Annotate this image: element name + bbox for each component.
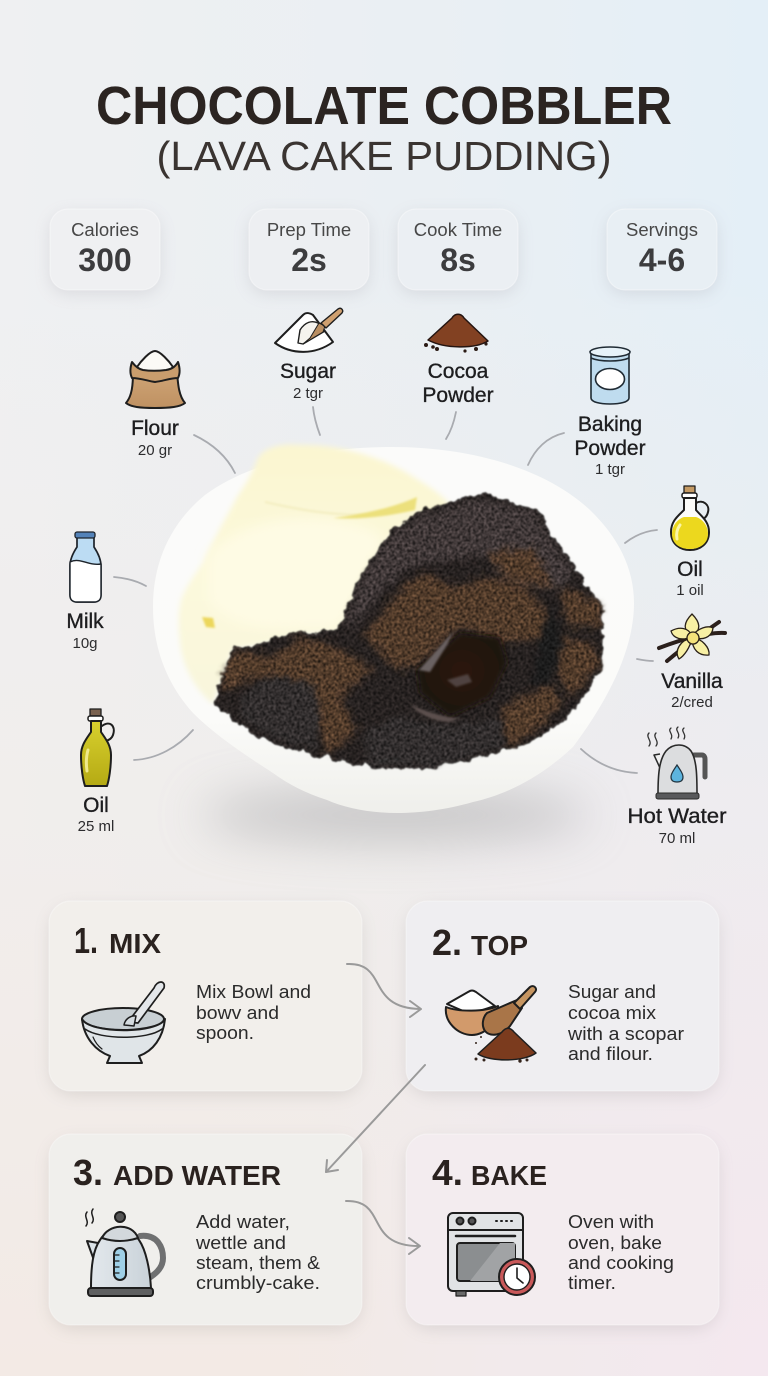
stat card: calories: 300 [78,242,132,278]
ingredient: cocoa powder: Powder [422,384,494,407]
icon: vanilla flower and pods [659,614,725,661]
icon: cocoa powder pile [424,314,488,353]
step text: crumbly-cake. [196,1272,320,1293]
step text: cocoa mix [568,1002,657,1023]
step text: Sugar and [568,981,656,1002]
stat card: cook time: 8s [440,242,476,278]
ingredient: cocoa powder [422,314,494,407]
step card 4: bake [406,1134,719,1329]
step heading: 3. [73,1152,103,1193]
step text: Oven with [568,1211,654,1232]
icon: sugar pile and scoop [275,308,343,352]
stat card: prep time [249,209,369,294]
step text: spoon. [196,1022,254,1043]
ingredient: oil left: 25 ml [78,818,114,835]
step heading: 4. [432,1152,463,1193]
ingredient: baking powder: Powder [574,437,646,460]
step text: and filour. [568,1043,653,1064]
ingredient: baking powder: Baking [578,413,642,436]
icon: mixing bowl with spoon [82,982,165,1063]
icon: flour sack [126,351,185,408]
step heading [432,1152,547,1193]
stat card: servings: 4-6 [639,242,685,278]
dark cobbler mass with brown and grey crumbs [212,493,603,769]
ingredient: flour: Flour [131,417,179,440]
step text [567,981,684,1064]
ingredient: oil right [671,486,709,599]
stat card: servings [607,209,717,294]
ingredient: sugar [275,308,343,402]
step heading: TOP [471,930,528,961]
icon: baking powder tin [590,347,630,404]
step text: wettle and [195,1232,286,1253]
arrow: step 3 to step 4 [346,1201,420,1254]
icon: milk bottle [70,532,101,602]
step heading: BAKE [471,1160,547,1191]
ingredient: cocoa powder: Cocoa [428,360,489,383]
ingredient: milk: 10g [72,635,98,652]
ingredient: oil left [78,709,114,835]
step text: Add water, [196,1211,290,1232]
ingredient: oil right: Oil [677,558,703,581]
arrow: step 2 to step 3 [326,1065,425,1172]
stat card: calories: Calories [71,219,139,240]
molten chocolate [410,632,507,722]
step text [195,1211,321,1293]
step heading: 2. [432,922,462,963]
step heading [432,922,528,963]
step text: timer. [568,1272,616,1293]
step heading: MIX [109,928,161,959]
ingredient: vanilla: 2/cred [671,694,713,711]
stat card: calories [50,209,160,294]
title: CHOCOLATE COBBLER [96,76,672,136]
icon: sugar bowl, scoop and cocoa pile [446,986,536,1063]
ingredient: sugar: Sugar [280,360,336,383]
step text: Mix Bowl and [196,981,311,1002]
step text [568,1211,674,1293]
step text: oven, bake [568,1232,662,1253]
ingredient: vanilla [659,614,725,711]
stat card: cook time: Cook Time [414,219,502,240]
step card 2: top [406,901,719,1095]
icon: kettle with steam and water drop [648,727,705,799]
stat card: prep time: Prep Time [267,219,351,240]
ingredient: hot water: 70 ml [659,830,695,847]
icon: oven with timer [448,1213,535,1296]
step text [196,981,311,1043]
icon: olive oil bottle [81,709,114,786]
icon: oil cruet [671,486,709,550]
ingredient: baking powder: 1 tgr [595,461,625,478]
ingredient: oil left: Oil [83,794,109,817]
ingredient: sugar: 2 tgr [293,385,323,402]
step text: steam, them & [196,1252,321,1273]
ingredient: milk: Milk [66,610,104,633]
title: (LAVA CAKE PUDDING) [156,133,612,179]
ingredient: oil right: 1 oil [676,582,704,599]
step card 3: add water [49,1134,362,1329]
ice cream scoop [179,445,453,704]
icon: kettle [86,1209,163,1296]
step heading: 1. [74,920,98,961]
chocolate cobbler bowl photo [153,445,634,813]
arrow: step 1 to step 2 [347,964,421,1017]
ingredient: milk [66,532,104,652]
step text: with a scopar [567,1023,684,1044]
ingredient: baking powder [574,347,646,478]
stat card: cook time [398,209,518,294]
ingredient: flour [126,351,185,459]
ingredient: flour: 20 gr [138,442,172,459]
title [96,76,672,179]
stat card: servings: Servings [626,219,698,240]
ingredient: vanilla: Vanilla [661,670,723,693]
ingredient: hot water [628,727,726,847]
step text: bowv and [196,1002,279,1023]
connector lines to bowl [114,407,657,773]
step heading: ADD WATER [113,1160,281,1191]
step card 1: mix [49,901,362,1095]
step heading [73,1152,281,1193]
ingredient: hot water: Hot Water [628,805,726,828]
step text: and cooking [568,1252,674,1273]
bowl shadow [200,789,590,841]
step heading [74,920,161,961]
stat card: prep time: 2s [291,242,327,278]
bowl body [153,447,634,813]
